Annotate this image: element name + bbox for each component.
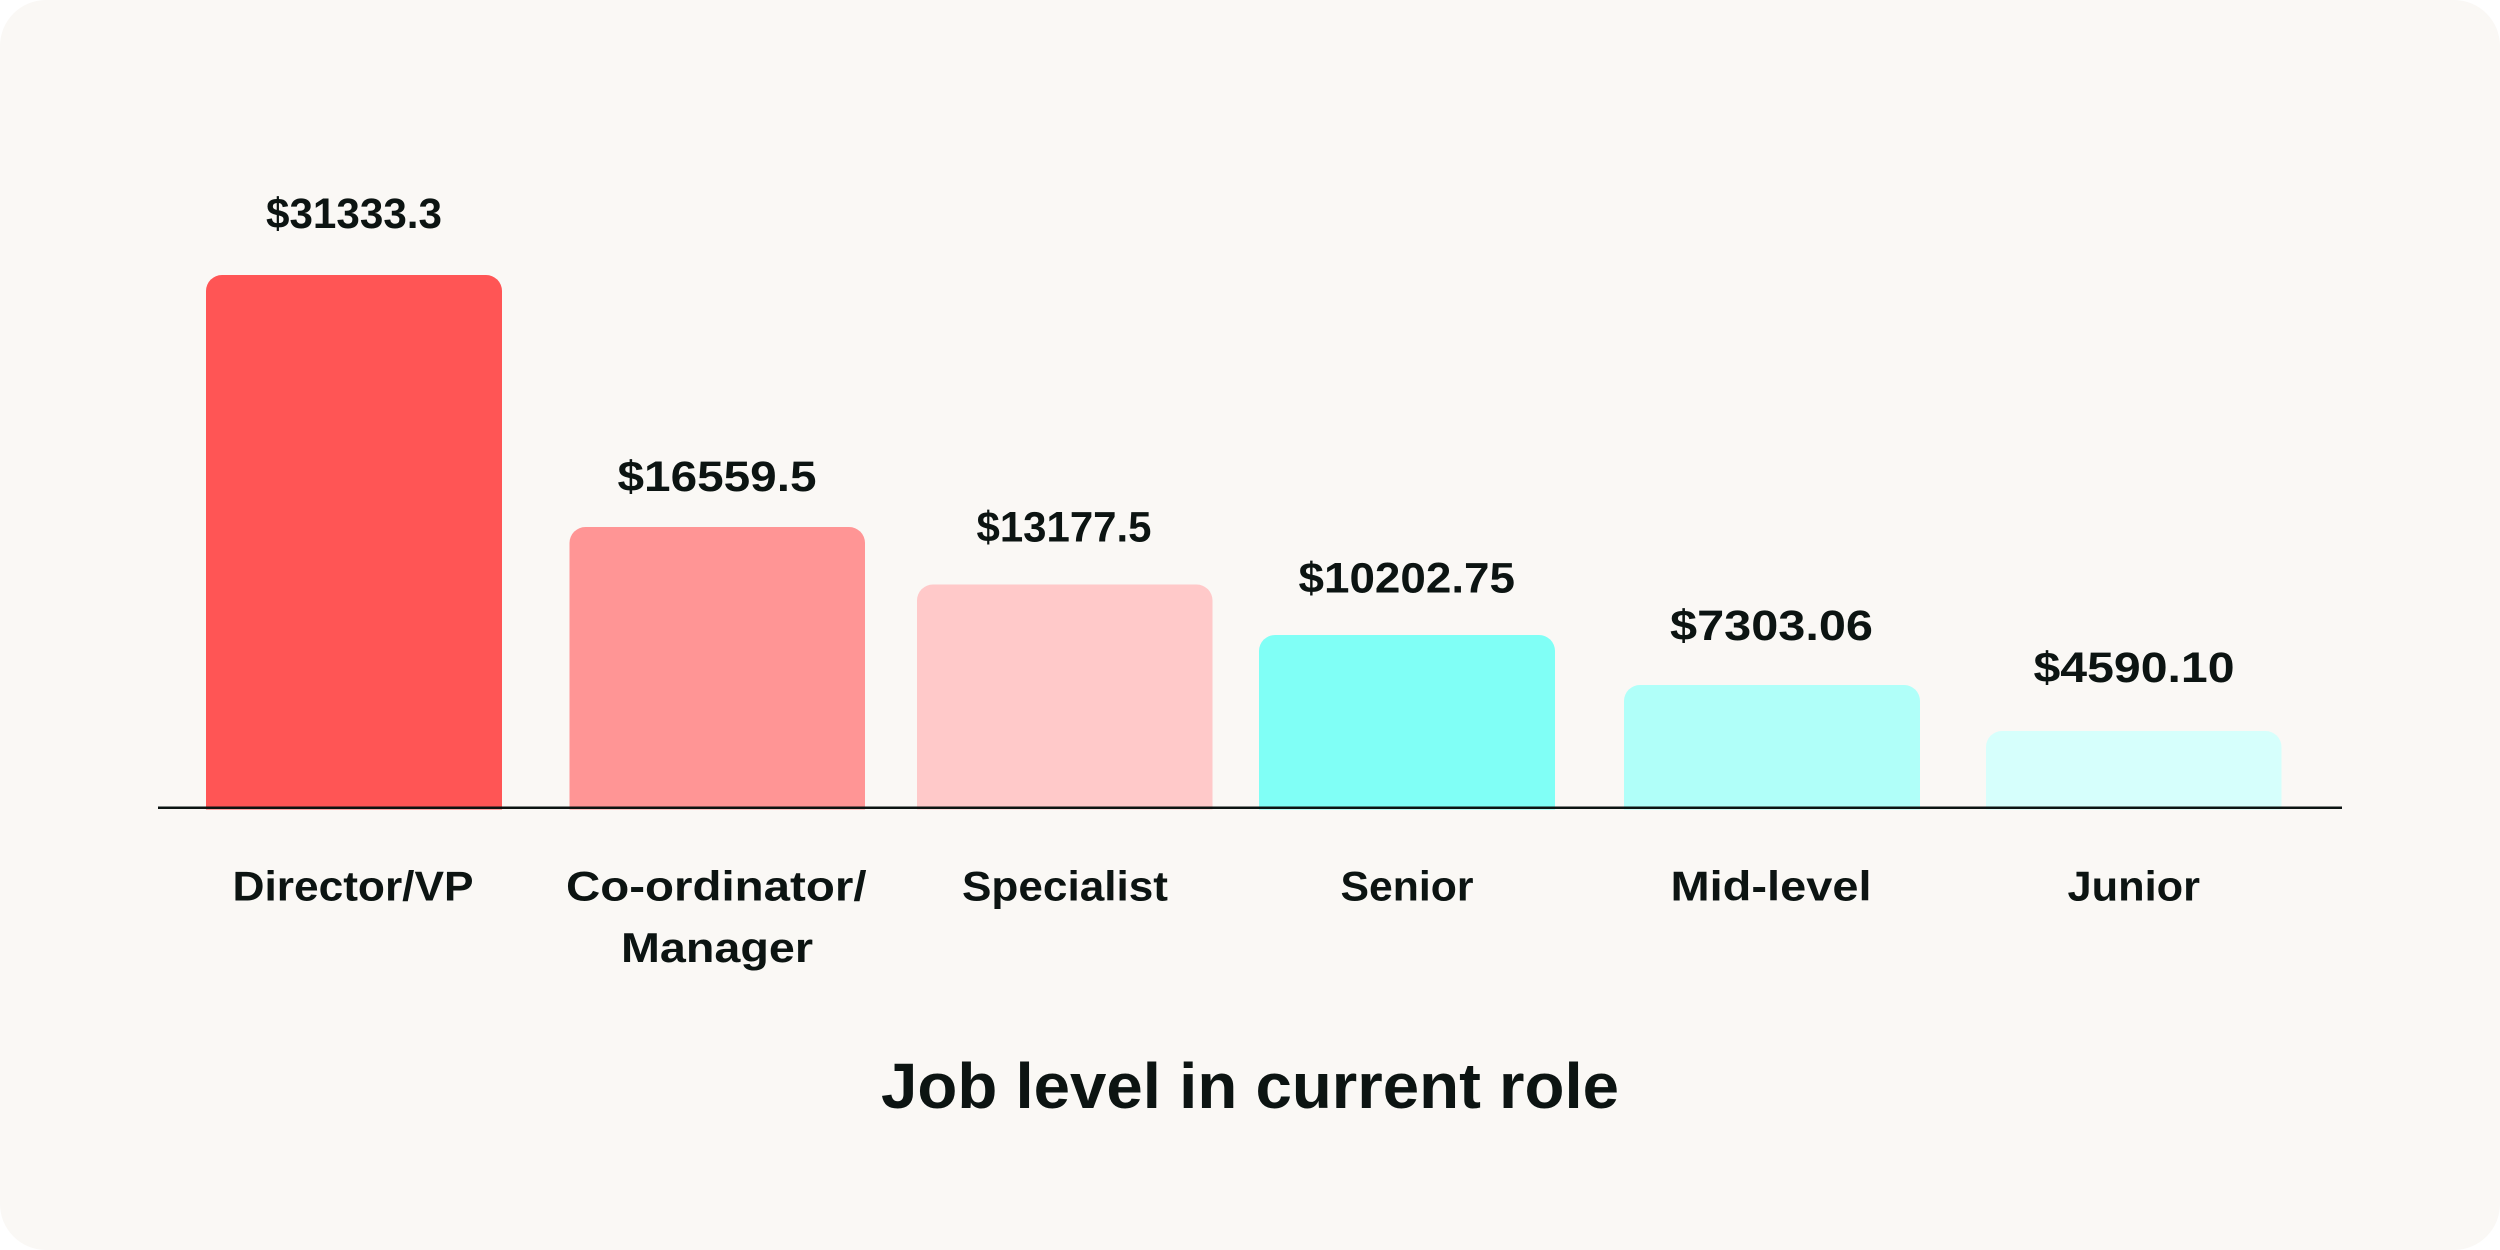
value: Director/VP: $31333.3 (266, 190, 442, 238)
label: Co-ordinator/Manager (566, 862, 867, 971)
label: Mid-level: Mid-level (1670, 862, 1872, 910)
value: Mid-level: $7303.06 (1670, 602, 1873, 650)
label: Director/VP: Director/VP (232, 862, 474, 910)
value: Senior: $10202.75 (1298, 554, 1515, 602)
bar: Mid-level (1624, 685, 1920, 810)
bar: Co-ordinator/Manager (570, 527, 865, 810)
label: Junior: Junior (2068, 862, 2200, 910)
value: Specialist: $13177.5 (976, 504, 1152, 552)
label: Co-ordinator/Manager: Co-ordinator/ (566, 862, 867, 910)
label: Co-ordinator/Manager: Manager (621, 924, 813, 971)
label: Specialist: Specialist (962, 862, 1168, 910)
label: Senior: Senior (1340, 862, 1474, 910)
chart title: Job level in current role (881, 1050, 1619, 1122)
bar: Senior (1259, 635, 1555, 810)
axis line (158, 806, 2342, 809)
value: Co-ordinator/Manager: $16559.5 (618, 453, 816, 501)
bar: Junior (1986, 731, 2282, 810)
bar: Specialist (917, 584, 1212, 810)
bar: Director/VP (206, 275, 502, 810)
value: Junior: $4590.10 (2034, 644, 2234, 692)
